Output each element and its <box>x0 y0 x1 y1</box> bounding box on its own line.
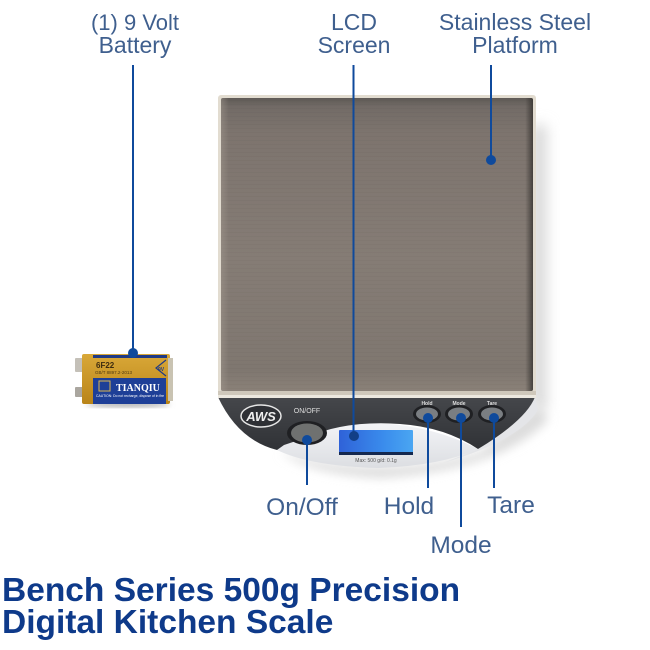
button: hold: Hold <box>421 401 433 407</box>
label: tare: Tare <box>487 492 535 519</box>
arrow: platform <box>486 65 496 165</box>
label: ON/OFF: ON/OFF <box>294 408 320 415</box>
label: mode: Mode <box>430 532 492 559</box>
icon: 9 volt battery: 9V <box>158 367 165 373</box>
button: mode <box>445 401 473 423</box>
label: LCD: LCD <box>331 9 377 35</box>
icon: 9 volt battery <box>75 354 173 407</box>
button: tare <box>478 401 506 423</box>
label: max capacity: Max: 500 g/d: 0.1g <box>355 458 397 464</box>
icon: 9 volt battery: CAUTION: Do not recharge, dispose of in fire <box>96 394 164 398</box>
logo: AWS: AWS <box>245 409 276 424</box>
arrow: mode <box>456 413 466 527</box>
stainless steel platform <box>218 95 536 398</box>
scale dark control base <box>218 397 535 450</box>
button: hold <box>413 401 441 423</box>
icon: 9 volt battery: GB/T 8897.2-2013 <box>95 370 132 375</box>
callout lines <box>128 65 499 527</box>
button: tare: Tare <box>487 401 497 407</box>
arrow: on/off <box>302 435 312 485</box>
label: platform: Platform <box>472 32 558 58</box>
label: battery: (1) 9 Volt <box>91 10 179 35</box>
label: hold: Hold <box>384 493 434 520</box>
label: battery: Battery <box>99 32 172 58</box>
arrow: battery <box>128 65 138 358</box>
arrow: LCD <box>349 65 359 441</box>
panel: scale <box>218 95 548 478</box>
button: on/off <box>287 421 327 445</box>
scale white shelf <box>277 423 478 468</box>
button: mode: Mode <box>452 401 466 407</box>
title: Digital Kitchen Scale <box>2 604 333 641</box>
label: LCD: Screen <box>318 32 390 58</box>
title: Bench Series 500g Precision <box>2 572 460 609</box>
labels <box>91 9 591 559</box>
icon: 9 volt battery: 6F22 <box>96 361 115 370</box>
icon: 9 volt battery: TIANQIU <box>116 383 160 394</box>
arrow: hold <box>423 413 433 488</box>
arrow: tare <box>489 413 499 488</box>
label: on/off: On/Off <box>266 494 338 521</box>
logo: AWS <box>241 405 281 427</box>
LCD screen <box>339 430 413 455</box>
label: platform: Stainless Steel <box>439 9 591 35</box>
